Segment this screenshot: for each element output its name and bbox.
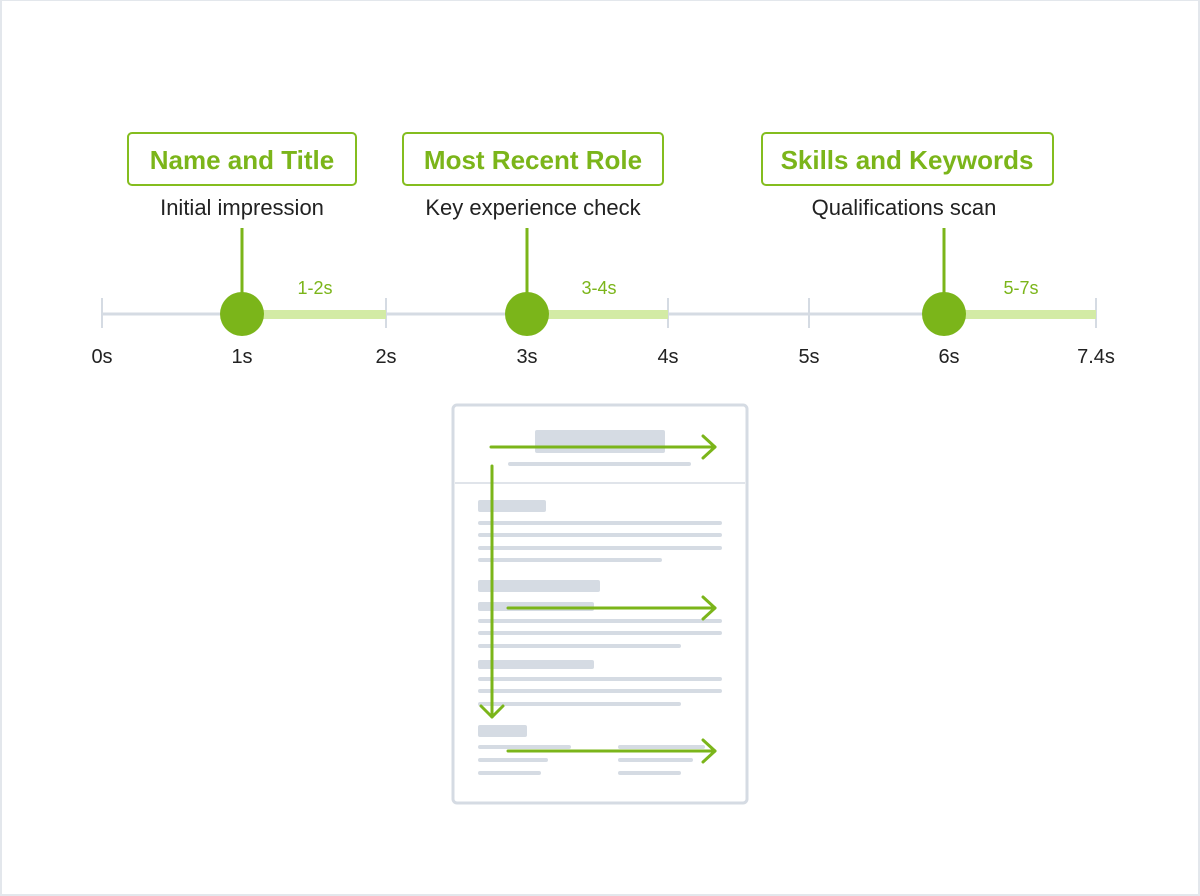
axis labels: 1s bbox=[231, 346, 253, 368]
milestone: Most Recent Role: 3-4s bbox=[581, 278, 617, 298]
milestone: Skills and Keywords: 5-7s bbox=[1003, 278, 1039, 298]
milestone: Most Recent Role bbox=[403, 133, 663, 336]
milestone: Skills and Keywords: Qualifications scan bbox=[812, 195, 996, 220]
axis labels: 4s bbox=[657, 346, 679, 368]
arrows bbox=[481, 436, 715, 762]
milestone: Name and Title: Initial impression bbox=[160, 195, 324, 220]
milestone: Skills and Keywords bbox=[762, 133, 1053, 336]
axis labels: 3s bbox=[516, 346, 538, 368]
timeline axis bbox=[102, 298, 1096, 328]
axis labels: 0s bbox=[91, 346, 113, 368]
milestone: Name and Title bbox=[128, 133, 356, 336]
axis labels: 6s bbox=[938, 346, 960, 368]
milestone: Name and Title: Name and Title bbox=[150, 145, 334, 175]
resume document bbox=[453, 405, 747, 803]
milestone: Most Recent Role: Most Recent Role bbox=[424, 145, 642, 175]
milestone: Name and Title: 1-2s bbox=[297, 278, 333, 298]
axis labels bbox=[91, 346, 1115, 368]
axis labels: 7.4s bbox=[1077, 346, 1115, 368]
axis labels: 2s bbox=[375, 346, 397, 368]
milestone: Skills and Keywords: Skills and Keywords bbox=[781, 145, 1033, 175]
axis labels: 5s bbox=[798, 346, 820, 368]
milestone: Most Recent Role: Key experience check bbox=[425, 195, 642, 220]
